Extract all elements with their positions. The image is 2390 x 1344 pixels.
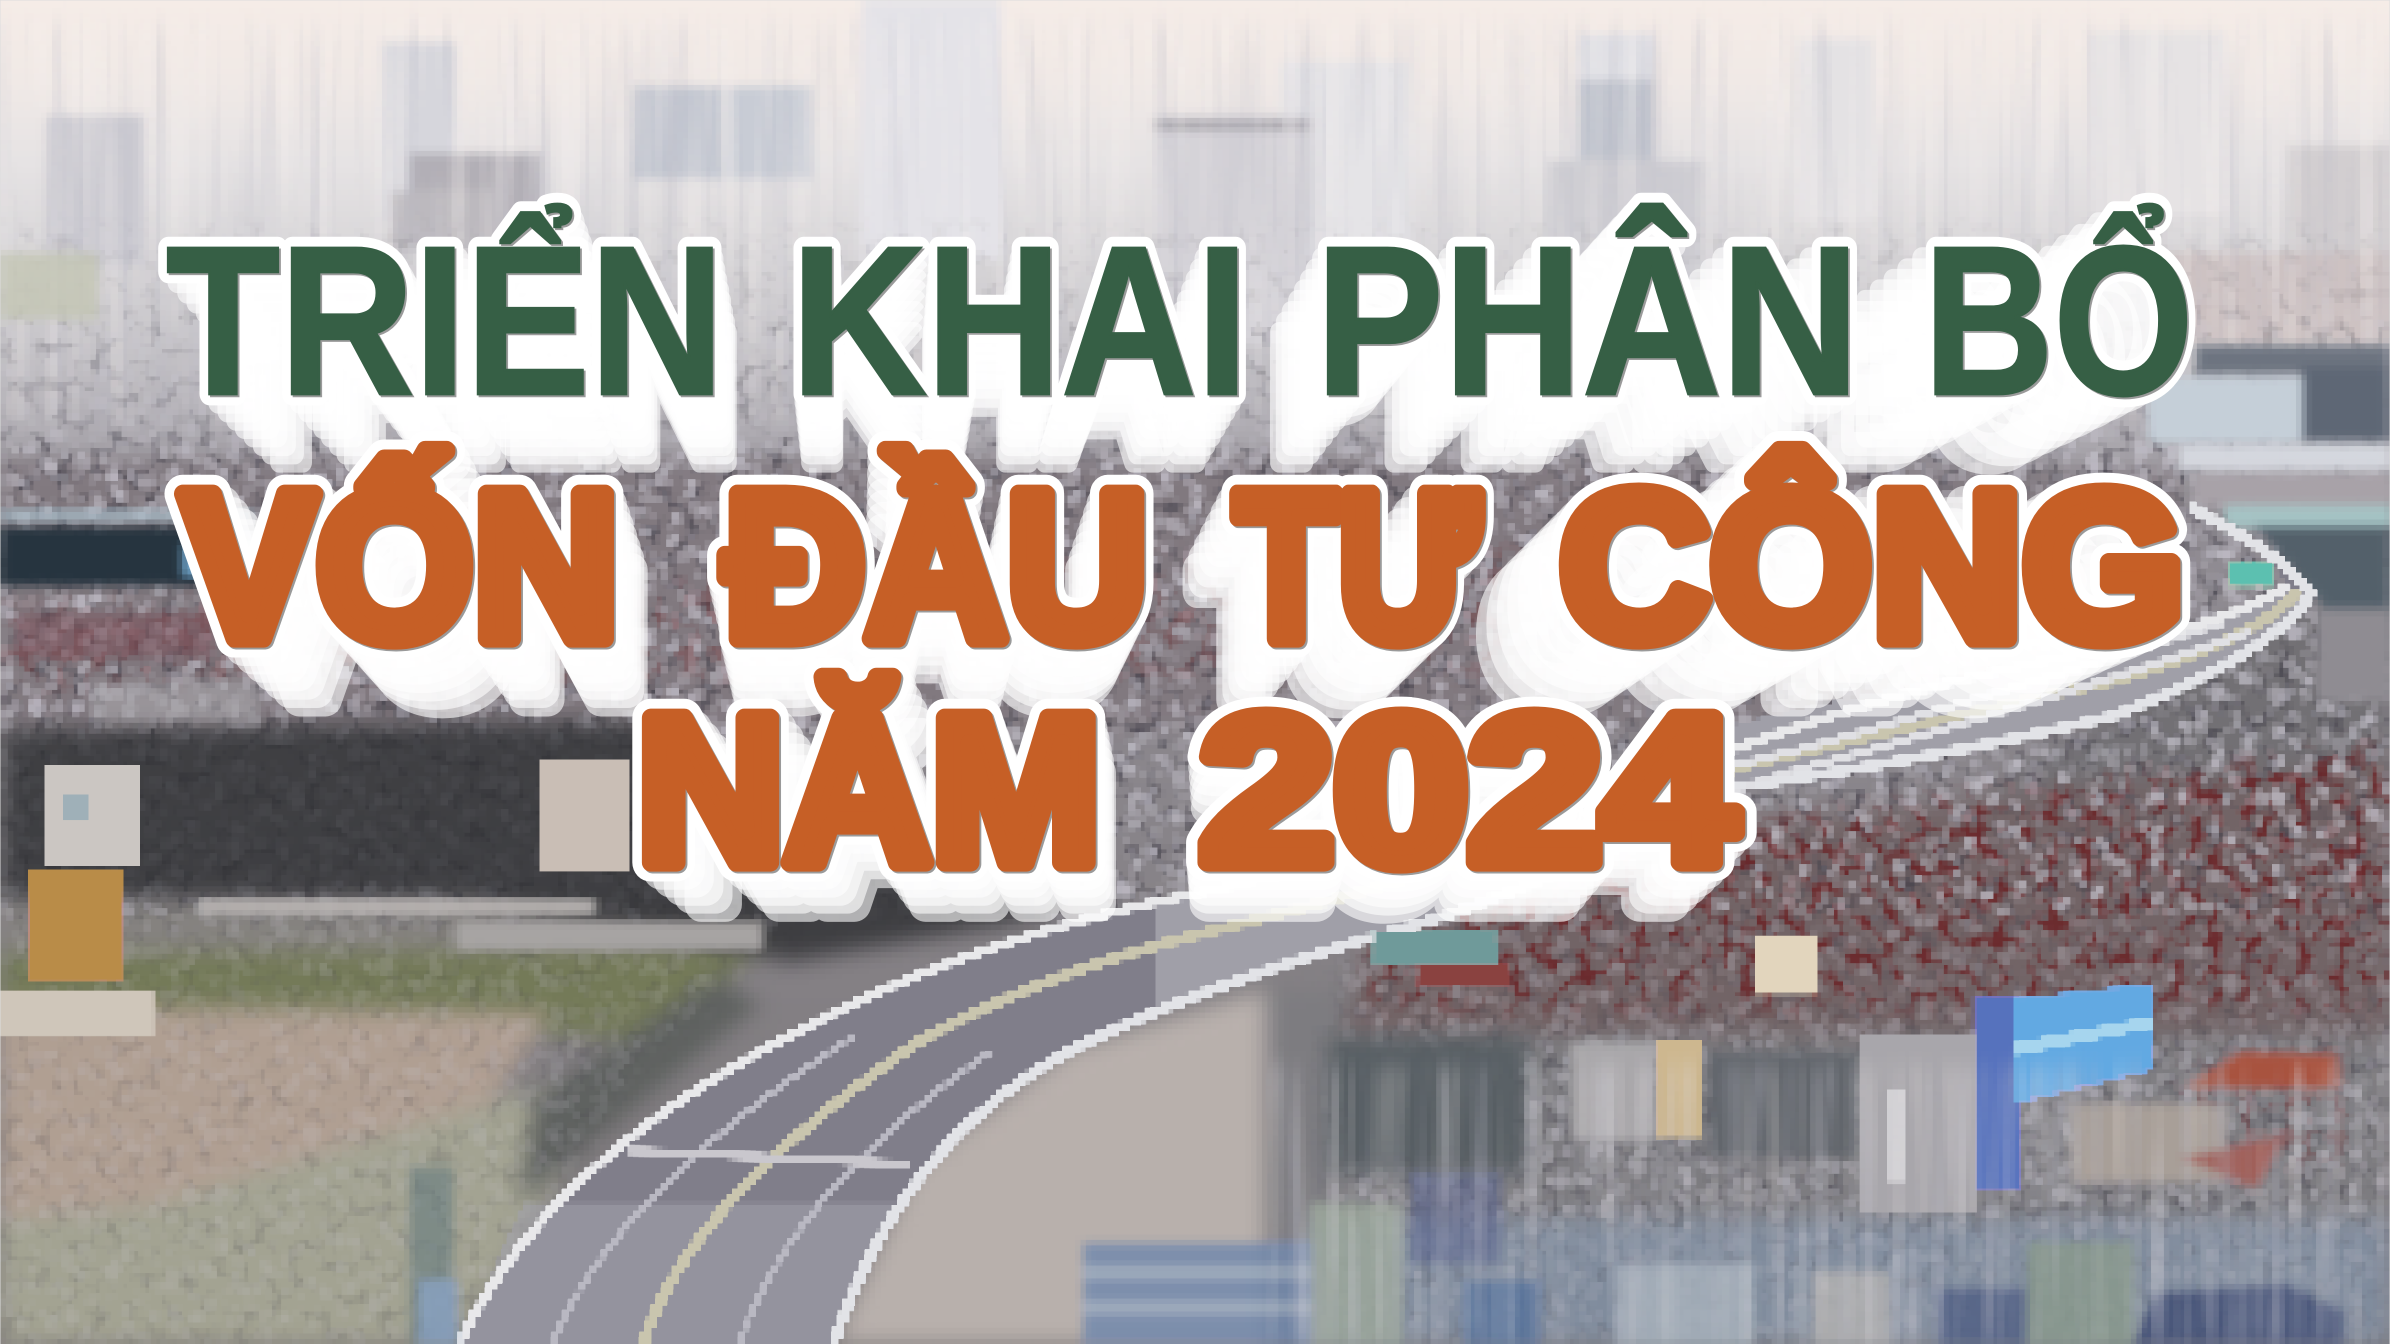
city texture: light walls [0, 381, 2390, 1218]
title line 2 extrusion [181, 449, 2184, 739]
title line 2 extrusion: CÔNG [1485, 529, 2045, 739]
title line 1 extrusion: KHAI [791, 202, 1248, 439]
title line 2: VỐN ĐẦU TƯ CÔNG: TƯ [1236, 450, 1481, 685]
road crossing line [628, 1150, 910, 1164]
title line 3 extrusion: 2024 [1202, 720, 1701, 938]
title line 2 extrusion: CÔNG [1506, 507, 2084, 724]
title line 1 extrusion: BỔ [1811, 292, 2053, 503]
title line 2 extrusion: VỐN [242, 518, 640, 732]
title line 2: VỐN ĐẦU TƯ CÔNG: VỐN [181, 449, 619, 683]
title line 2 extrusion: TƯ [1195, 529, 1414, 739]
title line 2 extrusion: TƯ [1235, 449, 1479, 683]
title line 1 extrusion: BỔ [1895, 224, 2157, 455]
streaked lower right reflection [1268, 1056, 2389, 1344]
title line 1: TRIỂN KHAI PHÂN BỔ: PHÂN [1315, 202, 1860, 439]
title line 1: TRIỂN KHAI PHÂN BỔ [166, 202, 2195, 441]
left buildings and scaffold [0, 762, 762, 1033]
left waterside details [0, 251, 274, 721]
title line 3 extrusion [637, 673, 1736, 946]
title line 2: VỐN ĐẦU TƯ CÔNG: ĐẦU [724, 449, 1148, 683]
title line 1 extrusion: BỔ [1839, 271, 2087, 488]
right side upper structures [2149, 344, 2390, 701]
title line 1 extrusion: PHÂN [1268, 292, 1754, 503]
title line 2 extrusion: ĐẦU [736, 518, 1121, 732]
title line 3 extrusion: 2024 [1202, 731, 1691, 946]
title line 2: VỐN ĐẦU TƯ CÔNG: ĐẦU [726, 450, 1150, 685]
title line 3: NĂM 2024: 2024 [1200, 673, 1736, 907]
title line 1 extrusion: PHÂN [1297, 237, 1820, 464]
title line 1 extrusion: BỔ [1854, 258, 2106, 479]
title line 1: TRIỂN KHAI PHÂN BỔ: BỔ [1925, 204, 2195, 441]
title line 1 extrusion: KHAI [798, 280, 1213, 495]
title line 2 extrusion: TƯ [1212, 494, 1441, 715]
title line 2 extrusion: CÔNG [1559, 449, 2184, 683]
title line 1 extrusion: BỔ [1924, 202, 2193, 439]
title line 2 extrusion: TƯ [1223, 472, 1460, 700]
title line 2 extrusion: TƯ [1206, 507, 1432, 724]
soft texture: lower field and lower right [0, 908, 2378, 1344]
title line 2: VỐN ĐẦU TƯ CÔNG: VỐN [183, 450, 621, 685]
title line 1: TRIỂN KHAI PHÂN BỔ: KHAI [793, 204, 1250, 441]
title line 1 extrusion: PHÂN [1310, 213, 1847, 447]
title line 3 extrusion: NĂM [678, 720, 1109, 938]
title line 1 extrusion: TRIỂN [222, 271, 735, 488]
title line 1 extrusion: PHÂN [1286, 258, 1794, 479]
title line 3: NĂM 2024: 2024 [1201, 674, 1738, 909]
title line 1 extrusion: PHÂN [1279, 271, 1780, 488]
title line 3 extrusion: 2024 [1200, 684, 1727, 915]
title line 3 extrusion: NĂM [689, 731, 1112, 946]
title line 2 extrusion: CÔNG [1549, 459, 2164, 691]
title line 1: TRIỂN KHAI PHÂN BỔ: KHAI [791, 202, 1248, 439]
title line 1 extrusion: KHAI [799, 292, 1208, 503]
road sign [2230, 564, 2273, 587]
title line 2 extrusion: ĐẦU [734, 507, 1126, 724]
title line 1: TRIỂN KHAI PHÂN BỔ: TRIỂN [168, 204, 726, 441]
title line 3 extrusion: NĂM [637, 673, 1100, 907]
title line 1 extrusion: TRIỂN [203, 246, 732, 471]
road fade at bottom [459, 1204, 899, 1344]
title line 2 extrusion: VỐN [202, 472, 626, 700]
title line 1 extrusion: PHÂN [1274, 280, 1767, 495]
title line 2 extrusion: ĐẦU [728, 472, 1139, 700]
title line 1 extrusion: BỔ [1825, 280, 2070, 495]
title line 2 extrusion: VỐN [212, 483, 629, 708]
title line 2 extrusion: ĐẦU [726, 459, 1143, 691]
title line 3 extrusion: NĂM [658, 696, 1105, 923]
blue billboard [2015, 984, 2151, 1103]
title line 2 extrusion: CÔNG [1528, 483, 2124, 708]
bottom ghosted buildings [408, 1166, 2344, 1344]
title line 2: VỐN ĐẦU TƯ CÔNG: CÔNG [1561, 450, 2186, 685]
title line 1 extrusion: KHAI [794, 237, 1233, 464]
road bright edges [459, 587, 2286, 1344]
title line 2 extrusion: VỐN [181, 449, 619, 683]
title line 1 extrusion: KHAI [795, 246, 1228, 471]
title line 2 extrusion: VỐN [232, 507, 636, 724]
title line 2: VỐN ĐẦU TƯ CÔNG: CÔNG [1559, 449, 2184, 683]
elevated highway [459, 507, 2311, 1344]
title line 2: VỐN ĐẦU TƯ CÔNG [181, 449, 2186, 685]
title line 3 extrusion: 2024 [1200, 673, 1736, 907]
title line 1 extrusion: TRIỂN [240, 292, 739, 503]
title line 3 extrusion: 2024 [1201, 709, 1709, 931]
title line 1 extrusion: BỔ [1881, 237, 2140, 464]
title line 3: NĂM 2024: NĂM [637, 673, 1100, 907]
title line 2 extrusion: TƯ [1229, 459, 1469, 691]
title line 3: NĂM 2024: NĂM [639, 674, 1102, 909]
title line 1 extrusion: BỔ [1910, 214, 2176, 447]
title line 2 extrusion: VỐN [222, 494, 633, 715]
title line 3 extrusion: 2024 [1201, 696, 1718, 923]
title line 2 extrusion: ĐẦU [724, 449, 1148, 683]
title line 1 extrusion: TRIỂN [212, 258, 733, 479]
title line 1 extrusion: TRIỂN [166, 202, 724, 439]
title line 2 extrusion: CÔNG [1517, 494, 2104, 715]
title: three lines [166, 202, 2195, 946]
dark trees on left [0, 719, 1067, 963]
title line 3 extrusion: NĂM [648, 684, 1103, 915]
distant towers [46, 0, 2390, 343]
road centre divider [643, 591, 2299, 1344]
road surface [459, 507, 2311, 1344]
title line 2 extrusion: TƯ [1217, 483, 1451, 708]
title line 1 extrusion: TRIỂN [185, 224, 728, 455]
title line 2 extrusion: CÔNG [1538, 472, 2144, 700]
title line 1: TRIỂN KHAI PHÂN BỔ: TRIỂN [166, 202, 724, 439]
title line 2 extrusion: CÔNG [1496, 518, 2064, 732]
title line 1 extrusion: BỔ [1868, 246, 2123, 471]
title line 1 extrusion: KHAI [792, 214, 1243, 447]
title line 3 extrusion: NĂM [668, 709, 1107, 931]
title line 1 extrusion [166, 202, 2193, 503]
title line 2 extrusion: VỐN [252, 529, 643, 739]
title line 2 extrusion: TƯ [1200, 518, 1422, 732]
right side buildings [1328, 931, 2337, 1210]
title line 1 extrusion: PHÂN [1315, 202, 1860, 439]
title line 1: TRIỂN KHAI PHÂN BỔ: BỔ [1924, 202, 2193, 439]
title line 1 extrusion: KHAI [793, 224, 1238, 455]
title line 1: TRIỂN KHAI PHÂN BỔ: PHÂN [1317, 204, 1861, 441]
vertical haze streaks [6, 24, 2373, 420]
title line 1 extrusion: TRIỂN [194, 237, 730, 464]
title line 2 extrusion: ĐẦU [730, 483, 1135, 708]
title line 2 extrusion: VỐN [191, 459, 622, 691]
city texture: dark rooftops [0, 228, 2390, 1218]
title line 1 extrusion: TRIỂN [175, 214, 726, 447]
city texture: red roofs [0, 541, 2390, 1166]
title line 2: VỐN ĐẦU TƯ CÔNG: TƯ [1235, 449, 1479, 683]
large tonal regions [0, 457, 2390, 1344]
title line 1 extrusion: KHAI [796, 258, 1223, 479]
title line 1 extrusion: TRIỂN [231, 280, 737, 495]
title line 2 extrusion: ĐẦU [732, 494, 1130, 715]
title line 1 extrusion: PHÂN [1292, 246, 1807, 471]
title line 2 extrusion: ĐẦU [738, 529, 1117, 739]
title line 1 extrusion: PHÂN [1303, 224, 1833, 455]
title line 3: NĂM 2024 [637, 673, 1738, 909]
title line 1 extrusion: KHAI [797, 271, 1218, 488]
